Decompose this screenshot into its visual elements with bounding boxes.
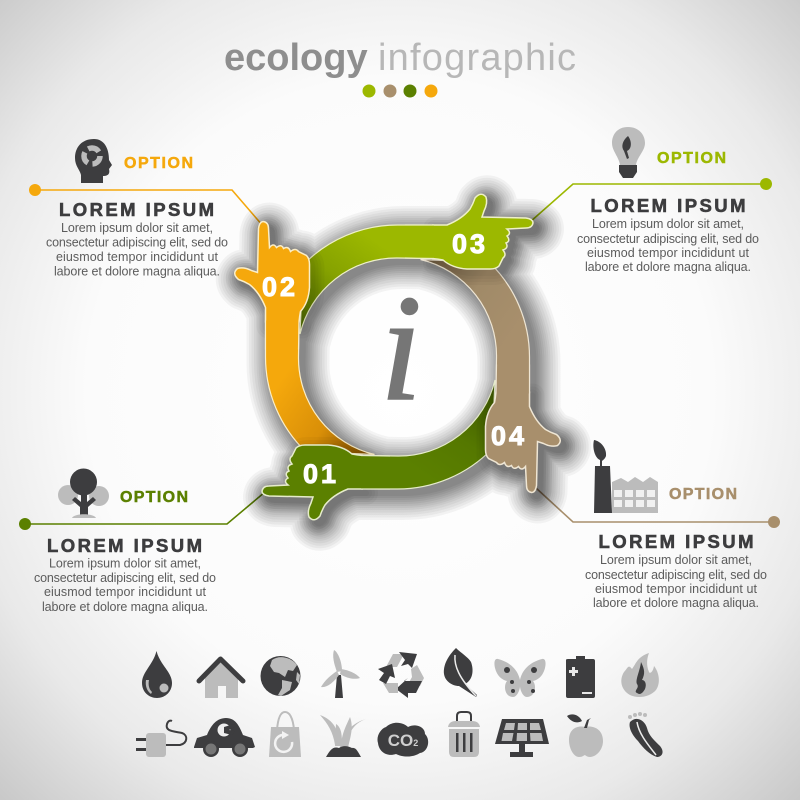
body text: eiusmod tempor incididunt ut xyxy=(587,246,750,260)
icon: electric car xyxy=(194,718,255,757)
icon: globe xyxy=(260,656,300,696)
body text: eiusmod tempor incididunt ut xyxy=(595,582,758,596)
option label: OPTION xyxy=(657,150,726,167)
title xyxy=(224,37,576,79)
heading: LOREM IPSUM xyxy=(47,535,202,556)
body text: eiusmod tempor incididunt ut xyxy=(44,585,207,599)
panel: option 02 xyxy=(46,139,228,278)
circular arrows of hands xyxy=(235,194,566,526)
heading: LOREM IPSUM xyxy=(59,199,214,220)
option label: OPTION xyxy=(124,155,193,172)
body text xyxy=(34,556,216,614)
band 02 xyxy=(266,322,374,454)
number 01: 01 xyxy=(303,459,339,489)
connector: option 04 xyxy=(536,488,780,528)
icon: battery xyxy=(566,656,595,698)
icon: trash can xyxy=(448,712,480,757)
soft ring shadow xyxy=(241,200,566,526)
icon: head with recycling xyxy=(75,139,112,183)
body text: labore et dolore magna aliqua. xyxy=(54,264,220,278)
title: infographic xyxy=(378,37,576,79)
icon: house xyxy=(199,659,243,698)
hand 04 xyxy=(486,392,560,492)
body text: consectetur adipiscing elit, sed do xyxy=(585,568,767,582)
icon: plug xyxy=(136,721,186,757)
connector: option 02 xyxy=(29,184,263,226)
body text: Lorem ipsum dolor sit amet, xyxy=(61,221,213,235)
icon: recycling symbol xyxy=(378,652,424,698)
panel: option 04 xyxy=(585,440,767,610)
body text: consectetur adipiscing elit, sed do xyxy=(46,236,228,250)
option label: OPTION xyxy=(120,489,188,506)
body text: Lorem ipsum dolor sit amet, xyxy=(49,556,201,570)
body text: labore et dolore magna aliqua. xyxy=(593,596,759,610)
body text: labore et dolore magna aliqua. xyxy=(42,600,208,614)
wrist joins xyxy=(266,225,530,489)
icon: tree xyxy=(58,468,109,518)
icon: water drop xyxy=(142,651,172,698)
icon: CO2 cloud: CO2 xyxy=(388,731,418,750)
number 02: 02 xyxy=(262,272,298,302)
connector: option 03 xyxy=(530,178,772,222)
icon: solar panel xyxy=(495,719,549,757)
hand 01 xyxy=(262,445,363,520)
body text: consectetur adipiscing elit, sed do xyxy=(577,232,759,246)
body text: labore et dolore magna aliqua. xyxy=(585,260,751,274)
icon: wind turbine xyxy=(321,650,360,698)
icon row xyxy=(136,648,663,757)
band 04 xyxy=(420,260,530,392)
body text: Lorem ipsum dolor sit amet, xyxy=(600,553,752,567)
option label: OPTION xyxy=(669,486,737,503)
band 01 xyxy=(363,380,495,489)
icon: shopping bag xyxy=(269,712,301,757)
body text xyxy=(577,217,759,274)
title: ecology xyxy=(224,37,368,79)
icon: flame xyxy=(621,653,659,697)
band 03 xyxy=(300,225,432,334)
body text xyxy=(585,553,767,610)
body text: eiusmod tempor incididunt ut xyxy=(56,250,219,264)
icon: light bulb with leaf xyxy=(612,127,645,178)
body text: Lorem ipsum dolor sit amet, xyxy=(592,217,744,231)
icon: CO2 cloud xyxy=(377,723,428,756)
panel: option 03 xyxy=(577,127,759,274)
hand shadows on the bands xyxy=(238,198,563,524)
icon: foot xyxy=(628,712,663,757)
icon: grass xyxy=(320,715,366,757)
hand 02 xyxy=(235,222,310,322)
hand 03 xyxy=(432,194,533,269)
body text: consectetur adipiscing elit, sed do xyxy=(34,571,216,585)
number 04: 04 xyxy=(491,421,527,451)
icon: leaf xyxy=(444,648,477,697)
body text xyxy=(46,221,228,278)
centre info letter: i xyxy=(380,264,422,432)
icon: apple xyxy=(567,714,603,757)
number 03: 03 xyxy=(452,229,488,259)
panel: option 01 xyxy=(34,468,216,614)
icon: factory with leaf smoke xyxy=(593,440,658,513)
connector: option 01 xyxy=(19,492,265,530)
heading: LOREM IPSUM xyxy=(598,531,754,552)
title colour dots xyxy=(362,84,438,98)
heading: LOREM IPSUM xyxy=(590,195,746,216)
icon: butterfly xyxy=(494,659,546,697)
